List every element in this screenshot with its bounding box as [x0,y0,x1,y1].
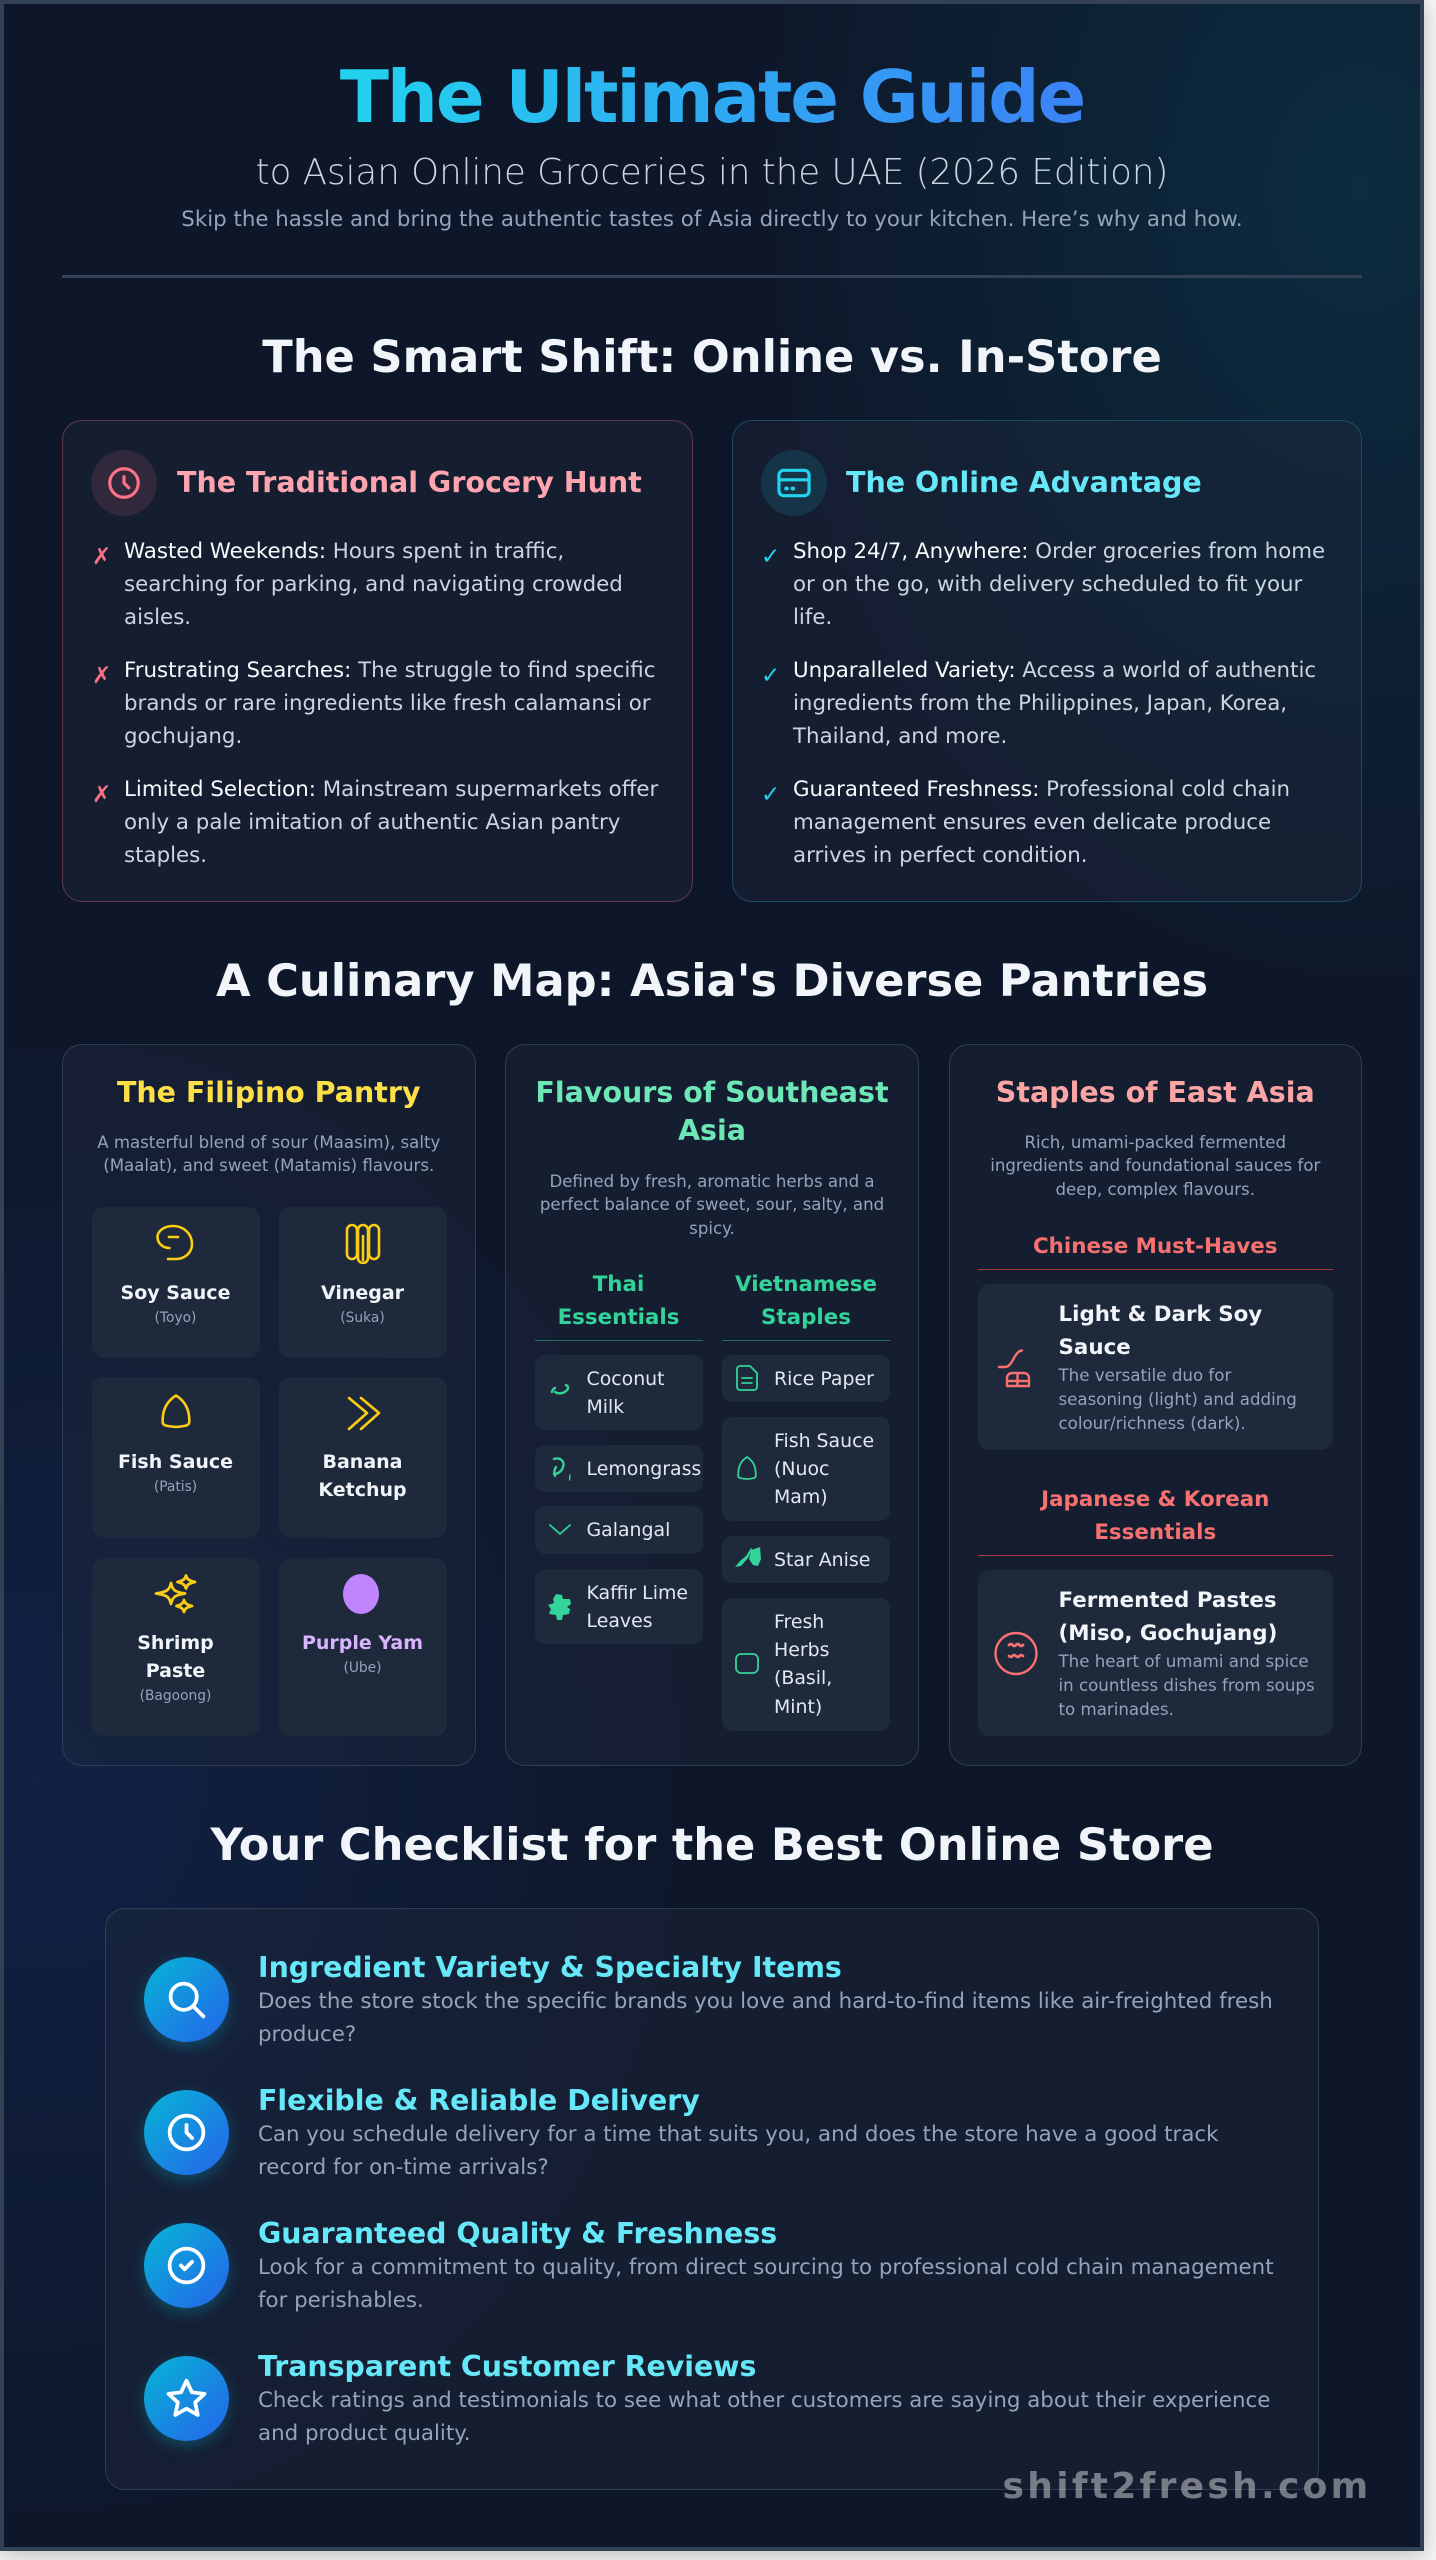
item: purple yam: Purple Yam [302,1632,423,1654]
checklist item: guaranteed quality: Look for a commitment to quality, from direct sourcing to professional cold chain management [258,2254,1274,2280]
panel: flavours of southeast asia [505,1044,919,1766]
item: limited selection: ✗ [92,782,111,808]
item: light and dark soy sauce: Light & Dark Soy [1058,1302,1262,1326]
item: fish sauce (nuoc mam): Mam) [774,1486,828,1508]
item: limited selection: staples. [124,843,207,868]
item: unparalleled variety: ✓ [761,662,780,688]
icon: star [144,2356,228,2441]
header divider [62,275,1362,278]
icon: fish sauce [161,1394,191,1428]
item: fermented pastes: to marinades. [1058,1700,1174,1719]
icon: coconut milk [550,1384,570,1394]
item: frustrating searches: Frustrating Searches: The struggle to find specific [124,658,655,682]
item: unparalleled variety: ingredients from the Philippines, Japan, Korea, [793,691,1287,716]
icon: shrimp paste [154,1574,196,1614]
item: frustrating searches: brands or rare ingredients like fresh calamansi or [124,691,651,716]
item: wasted weekends: searching for parking, and navigating crowded [124,572,623,597]
item: wasted weekends: ✗ [92,544,111,570]
panel description: spicy. [689,1219,735,1238]
item: shrimp paste: Paste [146,1660,205,1682]
item: galangal: Galangal [586,1519,670,1541]
column heading [558,1272,679,1330]
item: guaranteed freshness [761,776,1290,868]
column heading: Staples [761,1305,851,1330]
icon: vinegar [346,1224,380,1264]
column heading: Thai [593,1272,644,1296]
item: unparalleled variety: Unparalleled Variety: Access a world of authentic [793,658,1316,682]
item: fresh herbs: Fresh [774,1611,824,1633]
item: light and dark soy sauce: The versatile duo for [1058,1366,1231,1385]
checklist item: customer reviews: and product quality. [258,2421,471,2446]
heading: your checklist: Your Checklist for the Best Online Store [210,1819,1214,1871]
checklist item: flexible delivery: Flexible & Reliable Delivery [258,2084,700,2116]
panel: the filipino pantry [62,1044,476,1766]
column rule [722,1340,890,1341]
checklist item: ingredient variety: Does the store stock the specific brands you love and hard-to-find items like air-freighted fresh [258,1988,1273,2014]
checklist item: guaranteed quality [138,2216,1274,2319]
icon: clock [144,2090,228,2175]
panel heading: Asia [678,1114,746,1147]
item: fish sauce: Fish Sauce [118,1450,233,1472]
item: vinegar: Vinegar [321,1282,404,1304]
item: light and dark soy sauce [978,1284,1332,1450]
item: fish sauce [92,1377,260,1538]
item: fish sauce: (Patis) [154,1478,197,1494]
heading: the smart shift: The Smart Shift: Online vs. In-Store [262,331,1162,383]
panel heading: The Online Advantage [846,466,1202,499]
item: coconut milk: Coconut [586,1368,665,1390]
sub heading: japanese and korean: Essentials [1094,1520,1216,1545]
item: fermented pastes: in countless dishes from soups [1058,1676,1315,1695]
item: frustrating searches: gochujang. [124,724,242,749]
item: coconut milk [534,1355,702,1430]
item: shrimp paste: Shrimp [137,1632,214,1654]
title: The Ultimate Guide [340,55,1084,139]
item: guaranteed freshness: ✓ [761,782,780,808]
item: shop 24/7: or on the go, with delivery scheduled to fit your [793,572,1302,597]
item: shop 24/7: life. [793,605,832,630]
item: guaranteed freshness: management ensures even delicate produce [793,810,1271,835]
item: guaranteed freshness: Guaranteed Freshness: Professional cold chain [793,776,1290,802]
heading: a culinary map: A Culinary Map: Asia's Diverse Pantries [216,955,1208,1007]
panel: the online advantage [732,420,1362,902]
icon: fish sauce [737,1456,757,1480]
item: unparalleled variety [761,658,1316,749]
item: lemongrass [534,1445,702,1492]
item: rice paper [722,1355,890,1402]
panel description [540,1172,884,1238]
panel description [97,1132,440,1175]
column: vietnamese staples [722,1272,890,1731]
item: frustrating searches [92,658,655,749]
item: fish sauce (nuoc mam): Fish Sauce [774,1430,874,1452]
column rule [534,1340,702,1341]
panel description: Defined by fresh, aromatic herbs and a [549,1172,875,1190]
checklist item: flexible delivery [138,2084,1218,2186]
icon: paste tub [994,1632,1038,1676]
checklist item: customer reviews: Transparent Customer Reviews [258,2350,756,2382]
rule: chinese [978,1269,1332,1270]
item: wasted weekends: aisles. [124,605,191,630]
panel description: Rich, umami-packed fermented [1024,1132,1286,1152]
icon: credit card [761,450,827,516]
checklist item: guaranteed quality: for perishables. [258,2288,424,2313]
item: fermented pastes: Fermented Pastes [1058,1588,1277,1612]
panel heading: Flavours of Southeast [535,1076,889,1109]
sub heading: japanese and korean: Japanese & Korean [1041,1486,1269,1512]
item: fresh herbs: (Basil, [774,1667,832,1689]
column heading: Essentials [558,1305,679,1330]
watermark: shift2fresh.com [1003,2466,1372,2507]
item: soy sauce: (Toyo) [155,1310,196,1326]
panel description: (Maalat), and sweet (Matamis) flavours. [103,1156,434,1175]
icon: banana ketchup [348,1396,380,1430]
panel heading: The Traditional Grocery Hunt [177,466,642,499]
item: wasted weekends [92,538,623,630]
sub heading: chinese must-haves: Chinese Must-Haves [1033,1234,1278,1259]
item: limited selection [92,776,658,868]
icon: star anise [735,1547,761,1567]
item: coconut milk: Milk [586,1396,624,1418]
item: fermented pastes [978,1570,1332,1736]
checklist item: customer reviews [138,2350,1270,2452]
sub heading: japanese and korean [1040,1486,1269,1545]
item: shop 24/7 [761,538,1325,630]
panel heading: The Filipino Pantry [117,1076,421,1109]
checklist item: flexible delivery: Can you schedule delivery for a time that suits you, and does the store have a good track [258,2122,1218,2146]
checklist item: guaranteed quality: Guaranteed Quality & Freshness [258,2216,777,2250]
panel heading [535,1076,889,1147]
item: star anise: Star Anise [774,1549,870,1571]
icon: kaffir lime leaves [548,1594,571,1620]
item: rice paper: Rice Paper [774,1368,874,1390]
item: fish sauce (nuoc mam): (Nuoc [774,1458,829,1480]
rule: japanese and korean [978,1555,1332,1556]
icon: check circle [144,2223,228,2308]
panel: staples of east asia [948,1044,1362,1766]
item: vinegar: (Suka) [340,1310,385,1326]
checklist item: customer reviews: Check ratings and testimonials to see what other customers are saying about their experience [258,2388,1270,2412]
panel heading: Staples of East Asia [996,1076,1315,1109]
column heading: Vietnamese [735,1272,877,1296]
icon: lemongrass [552,1457,571,1481]
icon: search [144,1957,228,2042]
panel description [990,1132,1320,1199]
item: unparalleled variety: Thailand, and more. [793,724,1007,749]
column: thai essentials [535,1272,703,1644]
checklist item: ingredient variety: produce? [258,2022,356,2047]
item: kaffir lime leaves: Kaffir Lime [586,1582,688,1604]
item: shop 24/7: Shop 24/7, Anywhere: Order groceries from home [793,538,1325,564]
panel description: deep, complex flavours. [1056,1180,1255,1199]
icon: purple yam [343,1574,379,1614]
item: vinegar [278,1207,446,1358]
item: star anise [722,1536,890,1583]
item: banana ketchup: Ketchup [318,1479,407,1501]
item: soy sauce: Soy Sauce [121,1282,230,1304]
item: guaranteed freshness: arrives in perfect condition. [793,843,1088,868]
item: kaffir lime leaves: Leaves [586,1610,653,1632]
item: limited selection: Limited Selection: Mainstream supermarkets offer [124,776,658,802]
item: shrimp paste: (Bagoong) [140,1688,211,1704]
panel: the traditional grocery hunt [62,420,693,902]
item: fish sauce (nuoc mam) [722,1417,890,1521]
item: wasted weekends: Wasted Weekends: Hours spent in traffic, [124,538,564,564]
item: banana ketchup [278,1377,446,1538]
item: banana ketchup: Banana [322,1450,402,1472]
icon: rice paper [736,1365,758,1391]
checklist item: flexible delivery: record for on-time arrivals? [258,2155,549,2180]
item: galangal [534,1506,702,1554]
item: fermented pastes: (Miso, Gochujang) [1058,1621,1277,1646]
icon: soy bottle [998,1349,1030,1388]
item: shop 24/7: ✓ [761,544,780,570]
item: fresh herbs: Herbs [774,1639,829,1661]
item: lemongrass: Lemongrass [586,1458,701,1480]
icon: fresh herbs [735,1653,759,1674]
item: fresh herbs: Mint) [774,1696,822,1718]
item: purple yam [278,1558,446,1736]
item: shrimp paste [92,1558,260,1736]
icon: galangal [549,1524,571,1535]
subtitle: to Asian Online Groceries in the UAE (2026 Edition) [256,152,1168,192]
tagline: Skip the hassle and bring the authentic tastes of Asia directly to your kitchen. Here’s why and how. [181,206,1243,232]
item: purple yam: (Ube) [343,1660,382,1676]
panel: checklist [105,1908,1319,2490]
icon: clock [91,450,157,516]
item: fresh herbs [722,1598,890,1731]
panel description: A masterful blend of sour (Maasim), salty [97,1132,440,1152]
item: limited selection: only a pale imitation of authentic Asian pantry [124,810,620,835]
panel description: perfect balance of sweet, sour, salty, and [540,1195,884,1214]
column heading [735,1272,877,1330]
icon: soy sauce [156,1224,194,1260]
checklist item: ingredient variety [138,1950,1273,2052]
checklist item: ingredient variety: Ingredient Variety & Specialty Items [258,1950,842,1984]
item: soy sauce [92,1207,260,1358]
item: light and dark soy sauce: Sauce [1058,1335,1131,1360]
item: light and dark soy sauce: seasoning (light) and adding [1058,1390,1297,1409]
panel description: ingredients and foundational sauces for [990,1156,1320,1175]
item: kaffir lime leaves [534,1569,702,1644]
item: fermented pastes: The heart of umami and spice [1058,1652,1309,1671]
item: light and dark soy sauce: colour/richness (dark). [1058,1414,1246,1433]
item: frustrating searches: ✗ [92,662,111,688]
